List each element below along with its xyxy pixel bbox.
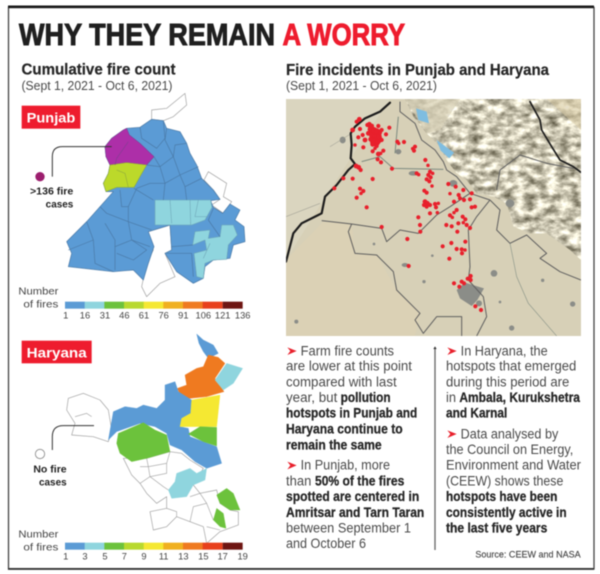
legend: number of fires, Punjab: 61 — [139, 311, 149, 321]
district boundaries — [68, 121, 220, 277]
Punjab choropleth map — [67, 93, 245, 297]
note: farm fire counts: pollution — [341, 390, 391, 405]
title: WHY THEY REMAIN — [19, 17, 275, 52]
date range: (Sept 1, 2021 - Oct 6, 2021) — [286, 78, 437, 93]
note: CEEW data: Data analysed by — [461, 426, 558, 441]
note: Punjab fires: In Punjab, more — [301, 458, 390, 473]
callout: more than 136 fire cases — [30, 147, 112, 211]
note: Haryana hotspots: Ambala, Kurukshetra — [459, 390, 580, 405]
legend: number of fires, Punjab: 91 — [178, 311, 189, 321]
legend: number of fires, Punjab: 46 — [119, 311, 130, 321]
note: CEEW data — [446, 426, 581, 535]
note: CEEW data: Environment and Water — [446, 458, 581, 473]
note: CEEW data: the last five years — [446, 520, 548, 535]
source: Source: CEEW and NASA — [475, 549, 581, 559]
legend: number of fires, Haryana: 13 — [178, 552, 189, 562]
legend: number of fires, Punjab: 76 — [158, 311, 169, 321]
note: farm fire counts: are lower at this point — [286, 359, 412, 374]
international border — [286, 102, 581, 262]
note: Punjab fires: between September 1 — [286, 520, 411, 535]
column divider — [433, 346, 437, 550]
callout: more than 136 fire cases: cases — [46, 200, 73, 211]
heading: cumulative fire count: Cumulative fire count — [22, 62, 176, 78]
note: farm fire counts — [286, 343, 417, 452]
note: Haryana hotspots: during this period are — [446, 374, 569, 389]
Punjab label: Punjab — [27, 109, 75, 125]
note: farm fire counts: hotspots in Punjab and — [286, 406, 417, 421]
panel: Punjab cumulative fire count — [18, 62, 250, 321]
title: A WORRY — [282, 17, 405, 52]
note: Punjab fires — [286, 458, 424, 551]
note: Punjab fires: than — [286, 474, 311, 489]
note: Haryana hotspots: in — [446, 390, 456, 405]
legend: number of fires, Haryana: 9 — [141, 552, 147, 562]
legend: number of fires, Punjab: 121 — [215, 311, 230, 321]
callout: no fire cases — [33, 426, 94, 489]
note: farm fire counts: year, but — [286, 390, 338, 405]
legend: number of fires, Punjab: 106 — [196, 311, 211, 321]
note: Haryana hotspots: hotspots that emerged — [446, 359, 576, 374]
mountains — [405, 99, 581, 260]
note: farm fire counts: compared with last — [286, 374, 397, 389]
note: Punjab fires: spotted are centered in — [286, 489, 419, 504]
satellite map: fire incidents — [286, 99, 581, 336]
Haryana label — [22, 341, 92, 363]
cities — [294, 137, 575, 331]
legend: number of fires, Haryana: 19 — [237, 552, 248, 562]
Punjab map and legend — [18, 93, 250, 321]
note: Haryana hotspots — [446, 343, 580, 421]
note: CEEW data: consistently active in — [446, 505, 567, 520]
note: CEEW data: the Council on Energy, — [446, 442, 573, 457]
heading: fire incidents in Punjab and Haryana: Fire incidents in Punjab and Haryana — [286, 62, 549, 79]
legend: number of fires, Punjab: of fires — [23, 300, 58, 311]
Haryana choropleth map — [67, 334, 243, 543]
note: CEEW data: (CEEW) shows these — [446, 474, 563, 489]
legend: number of fires, Haryana: of fires — [23, 543, 58, 554]
callout: more than 136 fire cases: >136 fire — [30, 186, 74, 197]
note: Punjab fires: Amritsar and Tarn Taran — [286, 505, 424, 520]
callout: no fire cases: cases — [39, 478, 67, 489]
note: Punjab fires: 50% of the fires — [315, 474, 405, 489]
legend: number of fires, Punjab: 31 — [100, 311, 110, 321]
note: Haryana hotspots: and Karnal — [446, 406, 507, 421]
note: CEEW data: hotspots have been — [446, 489, 557, 504]
callout: no fire cases: No fire — [33, 464, 67, 475]
legend: number of fires, Haryana: 11 — [159, 552, 169, 562]
legend: number of fires, Punjab: Number — [18, 286, 59, 297]
date range: (Sept 1, 2021 - Oct 6, 2021) — [22, 78, 172, 93]
legend: number of fires, Haryana — [18, 529, 248, 562]
fire dots — [333, 117, 483, 312]
Punjab label — [22, 106, 80, 129]
Haryana label: Haryana — [27, 344, 87, 360]
legend: number of fires, Haryana: 1 — [63, 552, 68, 562]
legend: number of fires, Haryana: 5 — [102, 552, 108, 562]
lakes — [416, 108, 429, 123]
note: Punjab fires: and October 6 — [286, 536, 366, 551]
legend: number of fires, Punjab: 1 — [63, 311, 68, 321]
legend: number of fires, Punjab: 16 — [80, 311, 90, 321]
panel: Haryana cumulative fire count — [18, 334, 248, 562]
note: Haryana hotspots: In Haryana, the — [461, 343, 548, 358]
legend: number of fires, Haryana: Number — [18, 529, 59, 540]
legend: number of fires, Punjab — [18, 286, 250, 321]
legend: number of fires, Haryana: 17 — [217, 552, 228, 562]
legend: number of fires, Haryana: 3 — [82, 552, 88, 562]
legend: number of fires, Haryana: 7 — [122, 552, 127, 562]
note: farm fire counts: Farm fire counts — [301, 343, 394, 358]
text column: left notes — [286, 343, 581, 559]
legend: number of fires, Haryana: 15 — [198, 552, 209, 562]
note: farm fire counts: remain the same — [286, 437, 382, 452]
state boundaries — [286, 102, 581, 336]
legend: number of fires, Punjab: 136 — [235, 311, 250, 321]
note: farm fire counts: Haryana continue to — [286, 422, 403, 437]
map base — [286, 99, 581, 336]
